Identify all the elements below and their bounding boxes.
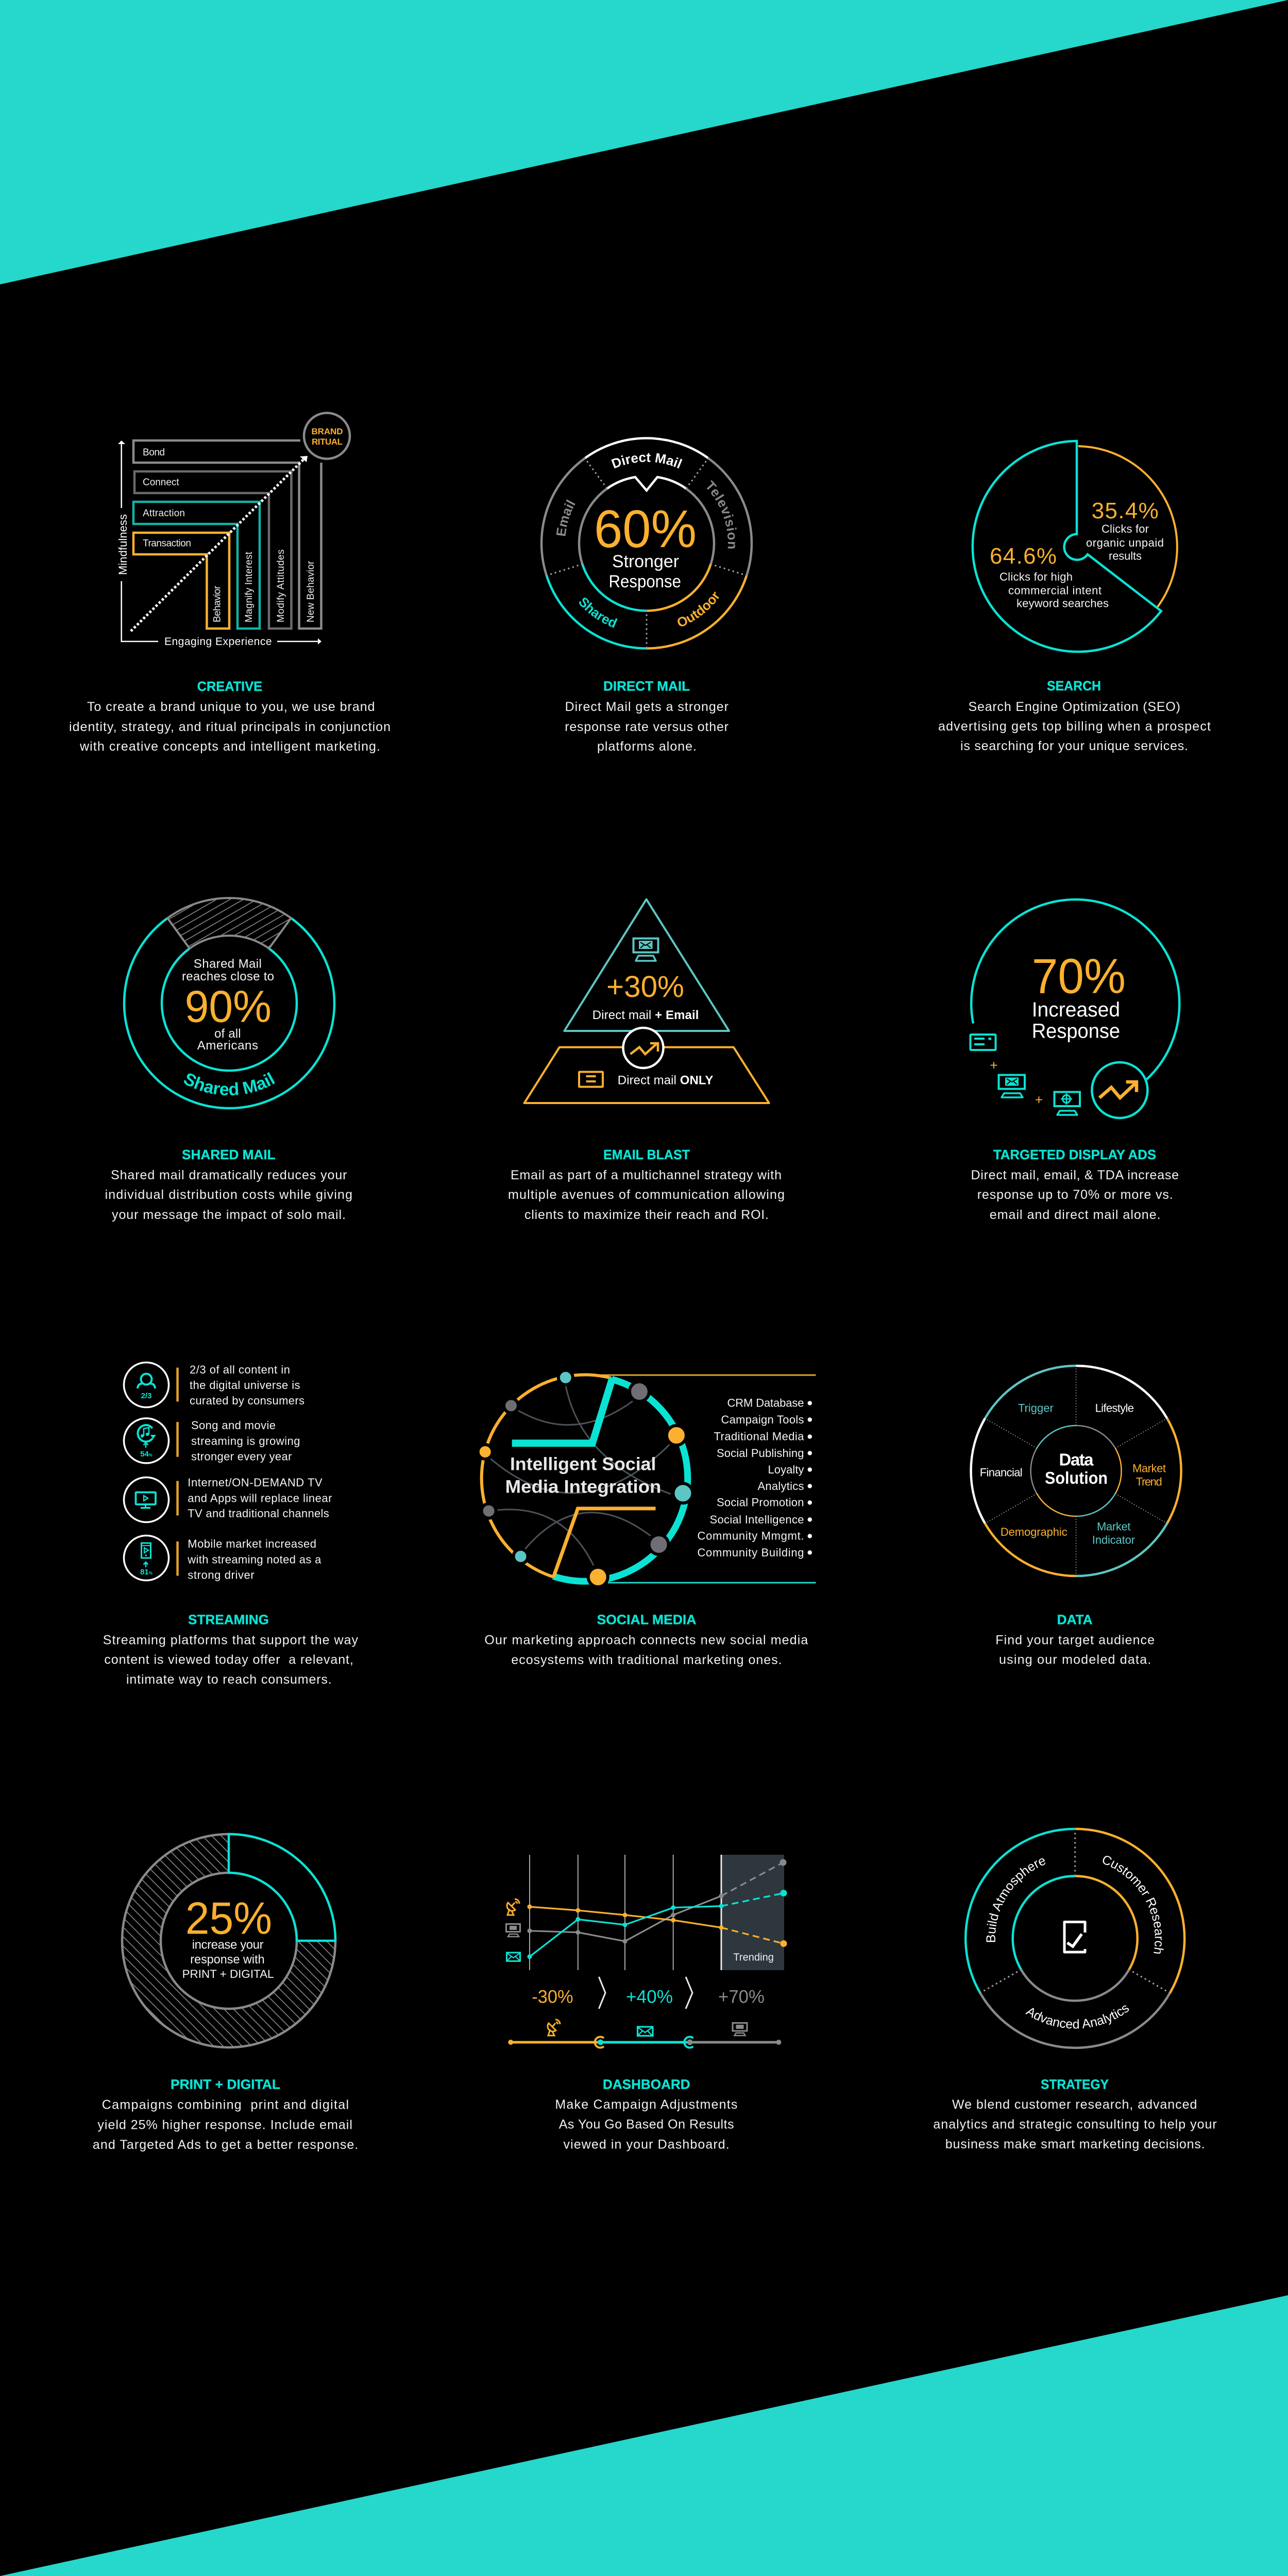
panel: social media <box>478 1370 816 1667</box>
curved labels: Advanced Analytics <box>1025 2005 1129 2029</box>
segment labels: Market <box>1097 1520 1130 1533</box>
body text: Streaming platforms that support the way <box>103 1633 359 1648</box>
body text <box>933 2097 1217 2151</box>
segment labels: Trigger <box>1018 1402 1054 1415</box>
panel: data <box>971 1366 1181 1667</box>
body text: your message the impact of solo mail. <box>112 1208 346 1222</box>
ring outlines <box>124 918 334 1108</box>
gray series <box>528 1859 786 1943</box>
panel: shared mail <box>105 897 352 1222</box>
heading: CREATIVE <box>197 679 262 694</box>
teal half ring <box>553 1379 688 1581</box>
axes <box>116 440 321 648</box>
icon: monitor <box>506 1924 520 1937</box>
icon: direct mail card <box>579 1072 603 1087</box>
center label: Data <box>1059 1450 1094 1469</box>
connect and modify attitudes track <box>134 471 292 629</box>
text <box>190 1363 304 1407</box>
hatched donut <box>122 1834 335 2047</box>
dotted dividers <box>980 1829 1170 1993</box>
text: 2/3 of all content in <box>190 1363 290 1376</box>
caption: print + digital <box>93 2076 358 2152</box>
panel: creative <box>69 413 391 754</box>
text: and Apps will replace linear <box>188 1492 332 1505</box>
center text with 90 percent stat: Shared Mail <box>194 957 262 971</box>
channel change percentages: -30% <box>532 1987 573 2007</box>
stat: 64.6 percent: commercial intent <box>1008 584 1101 597</box>
body text <box>484 1633 808 1667</box>
segment labels: Market <box>1132 1462 1166 1475</box>
body text: Our marketing approach connects new social media <box>484 1633 808 1648</box>
body text: Shared mail dramatically reduces your <box>111 1168 347 1182</box>
organic slice outline <box>1078 446 1177 608</box>
list: social capabilities: Campaign Tools <box>721 1413 804 1426</box>
curved labels: Build Atmosphere <box>986 1858 1046 1942</box>
center text with 90 percent stat: reaches close to <box>182 970 274 984</box>
connection curves <box>490 1385 671 1565</box>
caption: streaming <box>103 1612 359 1687</box>
caption: strategy <box>933 2076 1217 2151</box>
icon: envelope <box>507 1953 520 1961</box>
stat: 64.6 percent <box>990 544 1109 610</box>
stat: 35.4 percent <box>1086 498 1164 563</box>
list row: on-demand tv <box>124 1476 332 1522</box>
teal zigzag <box>512 1378 613 1443</box>
body text: Campaigns combining print and digital <box>102 2098 349 2112</box>
body text: platforms alone. <box>597 739 697 754</box>
text: the digital universe is <box>190 1379 300 1392</box>
panel: targeted display ads <box>971 900 1179 1222</box>
body text <box>103 1633 359 1687</box>
icon: satellite <box>548 2020 560 2036</box>
chart: strategy ring <box>964 1828 1186 2049</box>
curved channel labels: Direct Mail <box>611 453 682 469</box>
body text: analytics and strategic consulting to help your <box>933 2117 1217 2132</box>
track labels: Attraction <box>143 508 185 519</box>
segment labels: Lifestyle <box>1095 1402 1134 1415</box>
body text: content is viewed today offer a relevant, <box>104 1653 353 1667</box>
brand ritual circle: BRAND <box>311 427 343 436</box>
text: stronger every year <box>191 1450 292 1463</box>
curved labels: Customer Research <box>1103 1856 1164 1954</box>
divider bar <box>176 1367 179 1401</box>
heading: TARGETED DISPLAY ADS <box>993 1147 1156 1162</box>
icon: person: 2/3 <box>141 1392 151 1400</box>
stat: 35.4 percent: results <box>1109 550 1142 563</box>
icon: phone: 81% <box>140 1568 152 1577</box>
panel: email blast <box>508 900 785 1222</box>
ring title: Media Integration <box>505 1477 661 1497</box>
stat: plus 30 percent: +30% <box>606 970 684 1004</box>
text: Internet/ON-DEMAND TV <box>188 1476 323 1489</box>
icon: phone <box>124 1535 169 1581</box>
orange zigzag <box>553 1509 655 1578</box>
caption: data <box>995 1612 1155 1667</box>
icon: monitor <box>733 2023 747 2036</box>
text: Mobile market increased <box>188 1537 316 1550</box>
channel change percentages: +70% <box>718 1987 765 2007</box>
body text <box>93 2098 358 2152</box>
panel: direct mail <box>540 437 753 754</box>
track labels: Bond <box>143 447 165 458</box>
icon: music loop: 54% <box>140 1450 152 1459</box>
label: direct mail only: Direct mail ONLY <box>618 1074 713 1087</box>
timeline <box>508 2020 781 2048</box>
channel change percentages: +40% <box>626 1987 673 2007</box>
body text <box>938 700 1211 753</box>
caption: direct mail <box>565 679 728 754</box>
panel: print + digital <box>93 1834 358 2152</box>
stat: 60 percent <box>594 499 697 591</box>
curved label: Shared Mail <box>184 1072 275 1095</box>
list row: mobile market <box>124 1535 321 1581</box>
body text: We blend customer research, advanced <box>952 2097 1197 2112</box>
ring segments <box>541 438 752 648</box>
brand ritual circle: RITUAL <box>312 437 343 447</box>
list: social capabilities: Community Mmgmt. <box>698 1530 804 1543</box>
text <box>188 1476 332 1520</box>
segment labels <box>980 1402 1166 1546</box>
text: curated by consumers <box>190 1394 304 1407</box>
outer ring segments <box>971 1366 1181 1576</box>
track labels: New Behavior <box>306 561 316 622</box>
curved channel labels: Outdoor <box>677 591 719 626</box>
body text: email and direct mail alone. <box>990 1208 1161 1222</box>
center text with 90 percent stat <box>182 957 274 1053</box>
body text: identity, strategy, and ritual principals in conjunction <box>69 720 391 734</box>
heading: EMAIL BLAST <box>603 1147 690 1162</box>
top teal diagonal band <box>0 0 1288 284</box>
segment labels: Indicator <box>1092 1533 1135 1546</box>
body text: Search Engine Optimization (SEO) <box>969 700 1180 714</box>
list: social capabilities: Analytics <box>757 1480 804 1493</box>
ring title: Intelligent Social <box>510 1454 656 1474</box>
dotted dividers <box>985 1366 1167 1576</box>
chart: 25 percent donut <box>122 1834 335 2047</box>
chart: search pie <box>973 441 1177 652</box>
heading: STREAMING <box>188 1612 269 1628</box>
track labels: Transaction <box>143 538 191 549</box>
list: social capabilities <box>698 1397 812 1559</box>
stat: 25 percent: response with <box>190 1953 265 1967</box>
curved channel labels: Shared <box>579 598 618 628</box>
stat: 25 percent: 25% <box>185 1893 272 1943</box>
axes: Mindfulness <box>116 514 129 575</box>
caption: shared mail <box>105 1147 352 1222</box>
top triangle <box>564 900 729 1031</box>
list: social capabilities: Social Intelligence <box>710 1513 804 1526</box>
body text <box>995 1633 1155 1667</box>
center label: Solution <box>1045 1468 1108 1487</box>
heading: SHARED MAIL <box>182 1147 276 1162</box>
curved labels <box>986 1856 1164 2029</box>
text: Song and movie <box>191 1419 276 1432</box>
divider bar <box>176 1422 179 1457</box>
bottom teal diagonal band <box>0 2295 1288 2576</box>
body text <box>69 700 391 754</box>
hatched excluded sector <box>167 898 291 948</box>
attraction and magnify interest track <box>133 502 260 629</box>
segment labels: Demographic <box>1001 1526 1067 1538</box>
stat: 25 percent: increase your <box>192 1938 264 1952</box>
stat: 25 percent <box>182 1893 274 1980</box>
body text: clients to maximize their reach and ROI. <box>524 1208 769 1222</box>
track labels: Behavior <box>212 585 223 622</box>
text: streaming is growing <box>191 1434 300 1448</box>
caption: creative <box>69 679 391 754</box>
body text <box>555 2097 737 2151</box>
body text <box>105 1168 352 1222</box>
caption: email blast <box>508 1147 785 1222</box>
trending panel <box>721 1855 784 1970</box>
dotted dividers <box>547 458 747 648</box>
text <box>191 1419 300 1463</box>
body text: Email as part of a multichannel strategy with <box>511 1168 782 1182</box>
body text: with creative concepts and intelligent marketing. <box>79 739 380 754</box>
list: social capabilities: Community Building <box>698 1546 804 1559</box>
chart: pyramid <box>524 900 769 1103</box>
body text: multiple avenues of communication allowing <box>508 1188 785 1202</box>
body text: ecosystems with traditional marketing ones. <box>511 1653 782 1667</box>
chart: response arc <box>971 900 1179 1118</box>
dotted growth arrow <box>131 456 308 631</box>
curved channel labels <box>556 453 737 628</box>
stat: 70 percent <box>1032 949 1126 1043</box>
icon: checklist <box>1064 1922 1085 1952</box>
timeline segments <box>511 2041 778 2043</box>
body text: advertising gets top billing when a prospect <box>938 719 1211 734</box>
stat: 60 percent: 60% <box>594 499 697 558</box>
heading: DATA <box>1057 1612 1093 1628</box>
center text with 90 percent stat: of all <box>214 1027 241 1041</box>
center label <box>1045 1450 1108 1487</box>
teal arc <box>971 900 1179 1079</box>
icon: envelope <box>638 2027 653 2036</box>
chart: social network ring <box>478 1370 816 1587</box>
plus sign: + <box>990 1058 998 1073</box>
center text with 90 percent stat: Americans <box>197 1039 258 1053</box>
axes: Engaging Experience <box>164 636 272 648</box>
body text: yield 25% higher response. Include email <box>97 2117 352 2132</box>
body text <box>565 700 728 754</box>
stat: 25 percent: PRINT + DIGITAL <box>182 1968 274 1980</box>
heading: SEARCH <box>1047 678 1101 693</box>
stat: 70 percent: 70% <box>1032 949 1126 1004</box>
body text: response rate versus other <box>565 720 728 734</box>
network nodes <box>478 1370 692 1587</box>
panel: dashboard <box>506 1855 787 2151</box>
caption: targeted display ads <box>971 1147 1179 1222</box>
curved channel labels: Television <box>707 480 737 549</box>
body text <box>508 1168 785 1222</box>
list: social capabilities: CRM Database <box>727 1397 804 1410</box>
body text: using our modeled data. <box>999 1653 1151 1667</box>
heading: PRINT + DIGITAL <box>171 2076 280 2092</box>
list row: song and movie streaming <box>124 1418 300 1463</box>
caption: search <box>938 678 1211 753</box>
track labels: Magnify Interest <box>244 551 255 622</box>
body text: individual distribution costs while giving <box>105 1188 352 1202</box>
body text: response up to 70% or more vs. <box>977 1188 1173 1202</box>
horizontal rules <box>601 1375 816 1583</box>
list: social capabilities: Social Publishing <box>717 1447 804 1460</box>
plus sign: + <box>1035 1092 1043 1108</box>
highlighted quarter <box>229 1834 335 1941</box>
chart: direct mail ring <box>540 437 753 650</box>
channel change percentages <box>532 1987 765 2007</box>
stat: 35.4 percent: 35.4% <box>1092 498 1159 523</box>
stat: 70 percent: Response <box>1032 1020 1120 1043</box>
body text: and Targeted Ads to get a better response. <box>93 2138 358 2152</box>
transaction and behavior track <box>133 533 229 629</box>
icon: growth circle <box>623 1028 664 1068</box>
panel: strategy <box>933 1828 1217 2151</box>
body text: Make Campaign Adjustments <box>555 2097 737 2112</box>
track labels <box>143 447 316 622</box>
stat: 35.4 percent: organic unpaid <box>1086 536 1164 549</box>
body text: Direct Mail gets a stronger <box>565 700 728 714</box>
label: trending: Trending <box>733 1952 774 1963</box>
track labels: Connect <box>143 477 179 488</box>
bottom trapezoid <box>524 1047 769 1103</box>
stat: 60 percent: Stronger <box>612 552 679 571</box>
icon: satellite <box>507 1899 519 1915</box>
caption: dashboard <box>555 2076 737 2151</box>
list: social capabilities: Social Promotion <box>717 1496 804 1509</box>
body text <box>971 1168 1179 1222</box>
icon: mail card <box>971 1035 995 1050</box>
ring title <box>505 1454 661 1497</box>
chart: dashboard lines <box>506 1855 787 1970</box>
chart: data solution wheel <box>971 1366 1181 1576</box>
label: direct mail plus email: Direct mail + Email <box>592 1008 699 1022</box>
text <box>187 1537 321 1581</box>
icon: monitor with email <box>998 1075 1025 1097</box>
ring segments <box>965 1829 1184 2048</box>
heading: DIRECT MAIL <box>603 679 690 694</box>
panel: search <box>938 441 1211 753</box>
heading: STRATEGY <box>1041 2076 1109 2092</box>
stat: 35.4 percent: Clicks for <box>1101 522 1149 535</box>
bond and new behavior track <box>133 440 321 629</box>
chart: brand ritual staircase <box>116 413 350 648</box>
body text: business make smart marketing decisions. <box>945 2137 1205 2151</box>
body text: As You Go Based On Results <box>559 2117 734 2132</box>
icon: music loop <box>124 1418 169 1463</box>
body text: Find your target audience <box>995 1633 1155 1648</box>
icon: person <box>124 1362 169 1408</box>
divider bar <box>176 1481 179 1516</box>
text: strong driver <box>188 1568 255 1581</box>
body text: viewed in your Dashboard. <box>564 2137 730 2151</box>
icon: growth circle <box>1092 1062 1147 1118</box>
stat: 64.6 percent: keyword searches <box>1016 597 1109 610</box>
teal series <box>528 1890 787 1959</box>
stat: 70 percent: Increased <box>1032 998 1120 1021</box>
stat: 64.6 percent: 64.6% <box>990 544 1057 569</box>
chevrons <box>599 1977 692 2009</box>
stat: 64.6 percent: Clicks for high <box>999 570 1073 583</box>
heading: SOCIAL MEDIA <box>597 1612 697 1627</box>
center text with 90 percent stat: 90% <box>185 982 272 1031</box>
orange half ring <box>482 1375 611 1577</box>
text: with streaming noted as a <box>187 1553 321 1566</box>
panel: streaming <box>103 1362 359 1687</box>
segment labels: Trend <box>1136 1476 1162 1488</box>
list: social capabilities: Traditional Media <box>714 1430 804 1443</box>
list row: curated content <box>124 1362 304 1408</box>
body text: Direct mail, email, & TDA increase <box>971 1168 1179 1182</box>
divider bar <box>176 1541 179 1575</box>
paid slice outline <box>973 441 1161 652</box>
body text: To create a brand unique to you, we use brand <box>87 700 375 714</box>
segment labels: Financial <box>980 1466 1023 1479</box>
stat: 60 percent: Response <box>609 572 681 591</box>
body text: is searching for your unique services. <box>960 739 1188 753</box>
inner ring segments <box>1031 1426 1122 1516</box>
curved channel labels: Email <box>556 499 575 536</box>
heading: DASHBOARD <box>603 2076 690 2092</box>
icon: tv <box>124 1478 169 1522</box>
timeline nodes <box>508 2037 781 2048</box>
caption: social media <box>484 1612 808 1667</box>
text: TV and traditional channels <box>188 1507 329 1520</box>
grid lines <box>530 1855 721 1970</box>
orange series <box>528 1904 787 1947</box>
icon: monitor with target <box>1054 1092 1080 1115</box>
chart: shared mail ring <box>123 897 336 1110</box>
brand ritual circle <box>304 413 350 459</box>
icon: monitor with email <box>634 939 658 961</box>
track labels: Modify Attitudes <box>276 549 286 622</box>
body text: intimate way to reach consumers. <box>126 1672 332 1687</box>
list: social capabilities: Loyalty <box>768 1463 804 1476</box>
